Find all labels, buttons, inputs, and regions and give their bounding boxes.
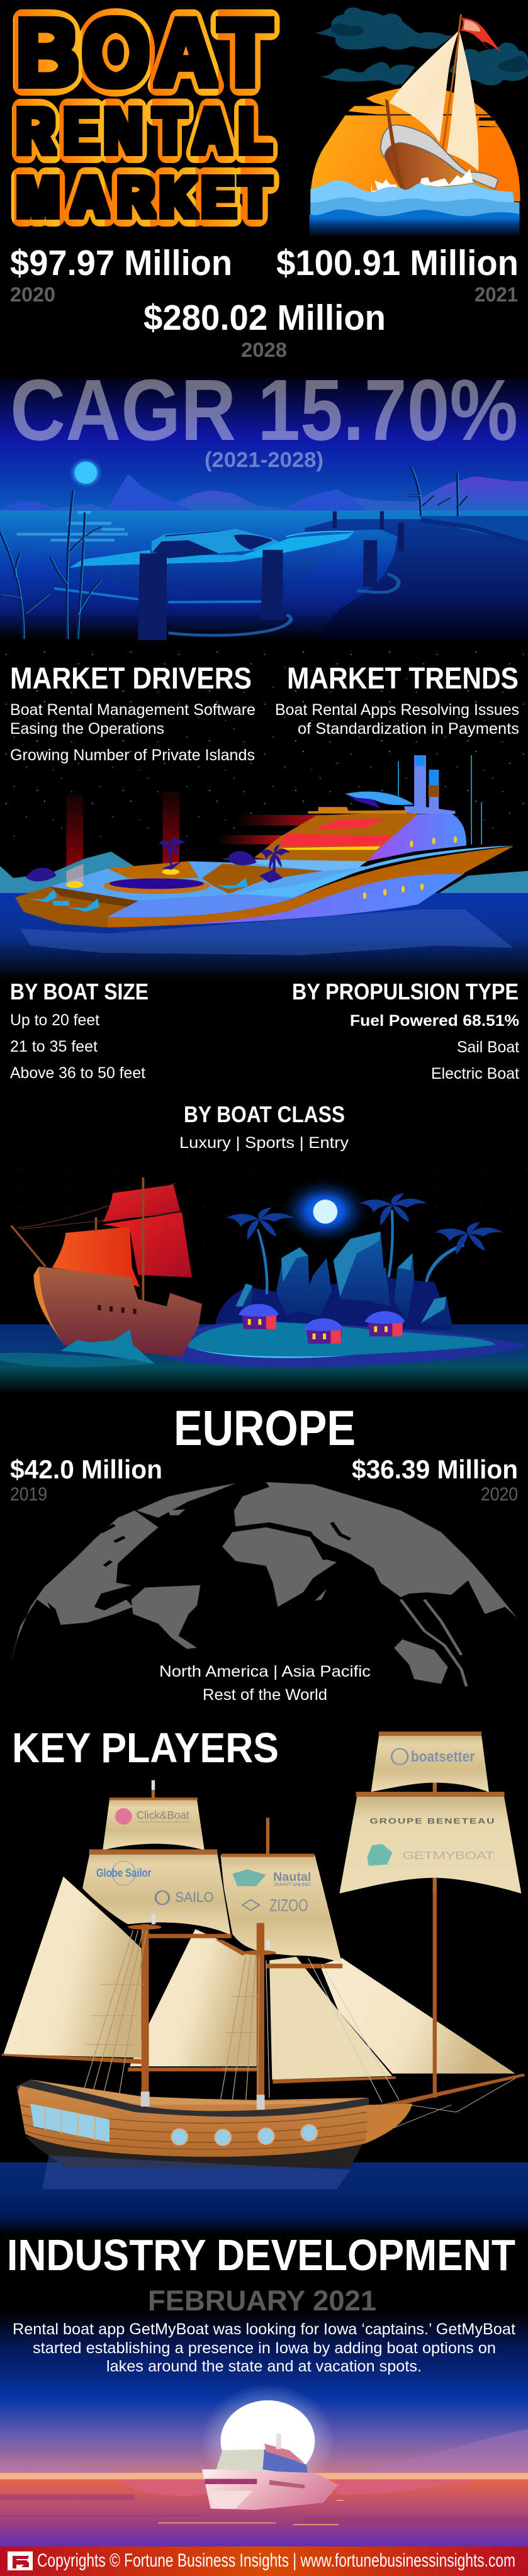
- title: T: [218, 0, 272, 106]
- clouds: [315, 8, 528, 86]
- regions list: [159, 1663, 371, 1704]
- title: R: [17, 95, 55, 167]
- illustration: red-sailed ship and island: [0, 1154, 528, 1394]
- yacht reflection: [20, 909, 514, 955]
- top sail: Nautal and Zizoo: SMART SAILING: [274, 1882, 311, 1887]
- mountains: [0, 474, 528, 517]
- stat: 2021 market size: [276, 243, 519, 306]
- sail: Click&Boat: [89, 1780, 217, 1853]
- sea reflections: [118, 2480, 478, 2496]
- top sail: Globe Sailor and Sailo: Globe Sailor: [96, 1867, 151, 1879]
- stat: 2020 market size: 2020: [10, 283, 55, 306]
- deck chairs: [27, 877, 247, 912]
- title: [16, 0, 272, 229]
- stat: Europe 2019: $42.0 Million: [10, 1454, 162, 1484]
- world map: [10, 1482, 517, 1686]
- illustration: cruise ship at sunset: [0, 2286, 528, 2547]
- stat: 2028 market size: [143, 298, 386, 361]
- moon: [220, 2400, 315, 2481]
- sail: boatsetter: [371, 1731, 489, 1792]
- rear main sail: [3, 1877, 142, 2058]
- umbrella: [345, 792, 414, 805]
- sea: [0, 893, 528, 980]
- sail: Groupe Beneteau and GetMyBoat: GETMYBOAT: [402, 1849, 495, 1862]
- dock posts: [138, 511, 404, 640]
- fore main sail: [269, 1957, 392, 2079]
- portholes: [363, 836, 457, 899]
- palm trees: [226, 1193, 503, 1294]
- stat: Europe 2019: [10, 1454, 162, 1505]
- masts and yards: [2, 1888, 525, 2112]
- title: O: [82, 0, 150, 106]
- dusk sky: [0, 2286, 528, 2474]
- panel: by boat size: 21 to 35 feet: [10, 1038, 98, 1055]
- heading: Europe: EUROPE: [174, 1400, 356, 1456]
- motor boat: [54, 528, 354, 602]
- ship hull: [34, 1266, 202, 1357]
- mooring ropes: [169, 574, 398, 635]
- panel: market trends: Boat Rental Apps Resolving Issues: [275, 701, 519, 719]
- stat: Europe 2020: $36.39 Million: [352, 1454, 518, 1484]
- bridge: [367, 813, 466, 861]
- rigging nets: [79, 1930, 515, 2128]
- island: [165, 1322, 528, 1368]
- masts and funnels: [398, 755, 481, 845]
- lake water: [0, 510, 528, 639]
- title: A: [71, 166, 108, 229]
- panel: market drivers: Boat Rental Management Software: [10, 701, 256, 719]
- moon reflection: [17, 512, 128, 540]
- panel: by propulsion type: Electric Boat: [431, 1065, 519, 1083]
- mid main sail: [130, 1929, 257, 2066]
- sunset sea: [0, 2479, 528, 2547]
- sail: Groupe Beneteau and GetMyBoat: [339, 1782, 521, 1893]
- CAGR period: (2021-2028): [205, 448, 323, 472]
- title: A: [155, 0, 217, 106]
- stat: 2021 market size: $100.91 Million: [276, 243, 519, 283]
- regions list: North America | Asia Pacific: [159, 1663, 371, 1680]
- title: L: [239, 95, 271, 167]
- stat: 2021 market size: 2021: [475, 283, 518, 306]
- panel: market drivers: MARKET DRIVERS: [10, 662, 252, 695]
- heading: key players: KEY PLAYERS: [12, 1724, 279, 1772]
- cruise ship: [202, 2434, 339, 2510]
- panel: by boat size: [10, 979, 149, 1082]
- illustration: sailboat at sunset: [310, 8, 528, 237]
- panel: by propulsion type: Sail Boat: [457, 1038, 519, 1056]
- development description: lakes around the state and at vacation spots.: [106, 2358, 422, 2375]
- upper decks: [254, 812, 418, 862]
- stat: 2028 market size: 2028: [241, 339, 287, 361]
- title: R: [118, 166, 154, 229]
- title: E: [64, 95, 99, 167]
- pool: [103, 877, 210, 894]
- deck glowing lamps: [66, 863, 179, 888]
- night sky: [0, 378, 528, 512]
- boat hull: [383, 143, 497, 194]
- sail: Click&Boat: Location de bateaux entre particuliers: [137, 1821, 189, 1824]
- ship reflection: [42, 2156, 351, 2189]
- title: T: [154, 95, 186, 167]
- development description: started establishing a presence in Iowa by adding boat options on: [33, 2339, 496, 2357]
- panel: by propulsion type: Fuel Powered 68.51%: [350, 1012, 519, 1030]
- main deck: [50, 861, 367, 901]
- stern: [15, 887, 138, 928]
- upper sails and logos: [89, 1731, 521, 1893]
- panel: by boat class: Luxury | Sports | Entry: [179, 1134, 349, 1152]
- flag: [461, 18, 500, 52]
- sun: [310, 87, 520, 201]
- top sail: Nautal and Zizoo: [220, 1818, 342, 1963]
- sail: Click&Boat: Click&Boat: [137, 1809, 189, 1821]
- panel: by propulsion type: [292, 979, 519, 1083]
- panel: market drivers: [10, 662, 256, 764]
- panel: market drivers: Easing the Operations: [10, 720, 164, 738]
- bow wave: [60, 1329, 155, 1364]
- sail: boatsetter: boatsetter: [411, 1748, 475, 1765]
- island rocks: [215, 1232, 453, 1330]
- stat: 2020 market size: [10, 243, 232, 306]
- palms and umbrellas: [26, 836, 290, 883]
- title: K: [160, 166, 196, 229]
- horizon band: [0, 2473, 528, 2479]
- illustration: night lake dock with motor boat: [0, 378, 528, 640]
- panel: by boat size: Up to 20 feet: [10, 1011, 99, 1029]
- panel: by boat size: BY BOAT SIZE: [10, 979, 149, 1004]
- title: A: [193, 95, 231, 167]
- panel: market trends: [275, 662, 519, 738]
- sail: Groupe Beneteau and GetMyBoat: GROUPE BENETEAU: [370, 1818, 495, 1826]
- moon glow: [200, 2383, 335, 2498]
- moon: [69, 457, 103, 488]
- dock: [421, 516, 528, 541]
- panel: by boat class: [179, 1101, 349, 1152]
- reeds: [0, 467, 469, 639]
- red light beams: [66, 791, 323, 874]
- top sail: Nautal and Zizoo: Nautal: [273, 1870, 311, 1884]
- title: N: [104, 95, 142, 167]
- top sail: Globe Sailor and Sailo: SAILO: [175, 1889, 214, 1905]
- regions list: Rest of the World: [203, 1686, 327, 1704]
- sails and masts: [389, 30, 459, 143]
- waves: [371, 169, 473, 193]
- stat: Europe 2020: 2020: [481, 1484, 518, 1505]
- panel: by boat class: BY BOAT CLASS: [184, 1101, 345, 1127]
- sky stars: [0, 1154, 528, 1265]
- top sail: Globe Sailor and Sailo: [82, 1851, 231, 1935]
- panel: market trends: of Standardization in Payments: [298, 720, 519, 738]
- title: B: [16, 0, 79, 106]
- sea: [0, 1324, 528, 1394]
- stat: Europe 2019: 2019: [10, 1484, 47, 1505]
- huts: [239, 1304, 405, 1344]
- panel: market drivers: Growing Number of Private Islands: [10, 746, 255, 764]
- ship hull: [17, 2079, 412, 2168]
- title: M: [17, 166, 59, 229]
- stat: 2028 market size: $280.02 Million: [143, 298, 386, 338]
- top sail: Nautal and Zizoo: ZIZOO: [269, 1896, 308, 1915]
- sailing ship: sea: [0, 2163, 528, 2235]
- panel: by boat size: Above 36 to 50 feet: [10, 1064, 145, 1082]
- date: FEBRUARY 2021: [148, 2285, 376, 2317]
- stat: 2020 market size: $97.97 Million: [10, 243, 232, 283]
- moon glow: [278, 1176, 372, 1246]
- icon: Fortune Business Insights logo: [8, 2551, 33, 2570]
- title: T: [240, 166, 271, 229]
- stat: Europe 2020: [352, 1454, 518, 1505]
- footer band: [0, 2546, 528, 2576]
- development description: Rental boat app GetMyBoat was looking for Iowa ‘captains.’ GetMyBoat: [13, 2320, 515, 2338]
- title: E: [201, 166, 235, 229]
- far right jib: [320, 1958, 515, 2074]
- hull side: [108, 873, 464, 928]
- illustration: sailing ship: [2, 1818, 525, 2189]
- development description: [13, 2320, 515, 2375]
- distant mountains: [0, 852, 528, 894]
- sky swooshes: [0, 2429, 528, 2473]
- illustration: luxury yacht: [0, 755, 528, 980]
- red sails: [11, 1178, 192, 1302]
- starfield: [0, 648, 528, 837]
